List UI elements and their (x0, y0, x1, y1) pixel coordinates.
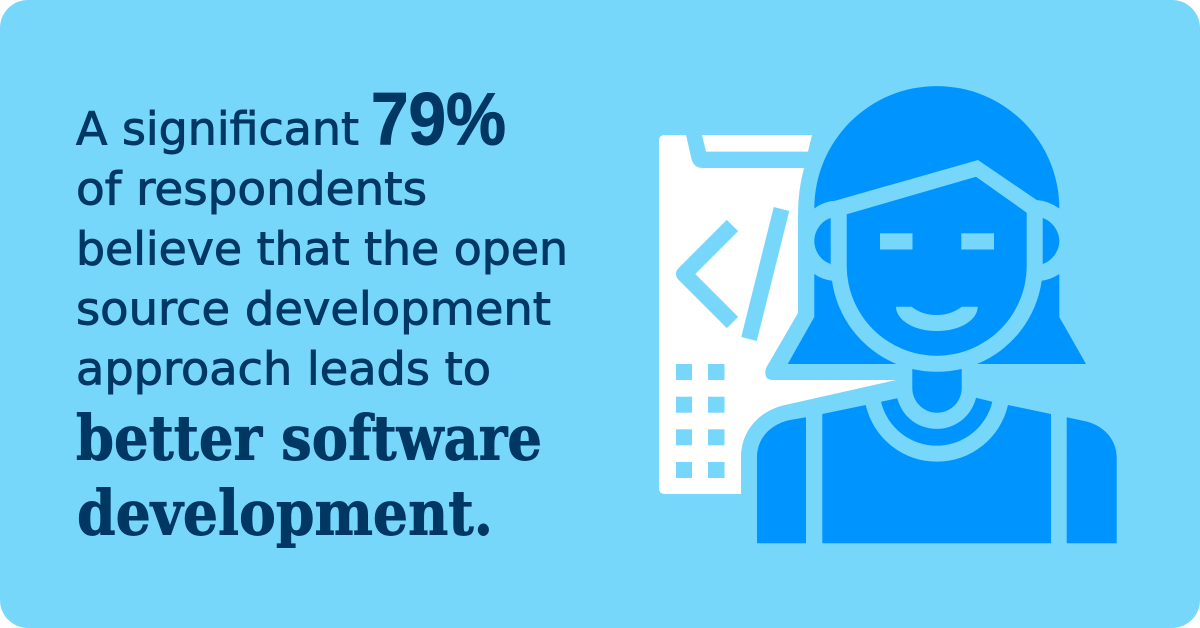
torso center (822, 405, 1051, 543)
mouth (896, 307, 978, 331)
ear left (814, 218, 831, 264)
text: line 3: believe that the open (76, 222, 568, 275)
text: line 4: source development (76, 282, 551, 335)
torso left sleeve (757, 417, 806, 543)
ear right (1043, 218, 1059, 264)
eye left (880, 233, 912, 250)
neck (912, 369, 962, 413)
hair right (977, 274, 1086, 364)
text: line 5: approach leads to (76, 342, 491, 395)
text: better software: better software (76, 401, 542, 474)
document sheet (659, 135, 896, 494)
icon: person (757, 86, 1117, 543)
face (847, 177, 1027, 356)
eye right (961, 233, 994, 250)
torso right sleeve (1067, 417, 1117, 543)
text: 79 percent: 79% (371, 77, 506, 160)
hair left (788, 274, 896, 364)
document dots grid (676, 364, 724, 478)
text: lead-in: A significant (76, 102, 359, 155)
code chevron (684, 226, 732, 322)
document top tab (702, 135, 812, 152)
icon: code document behind person (659, 135, 896, 494)
hair top (814, 86, 1059, 208)
text block: statistic statement (76, 77, 568, 549)
code slash (749, 209, 782, 339)
text: development: development. (77, 476, 493, 549)
collar band (881, 398, 992, 446)
text: line 2: of respondents (76, 162, 427, 215)
